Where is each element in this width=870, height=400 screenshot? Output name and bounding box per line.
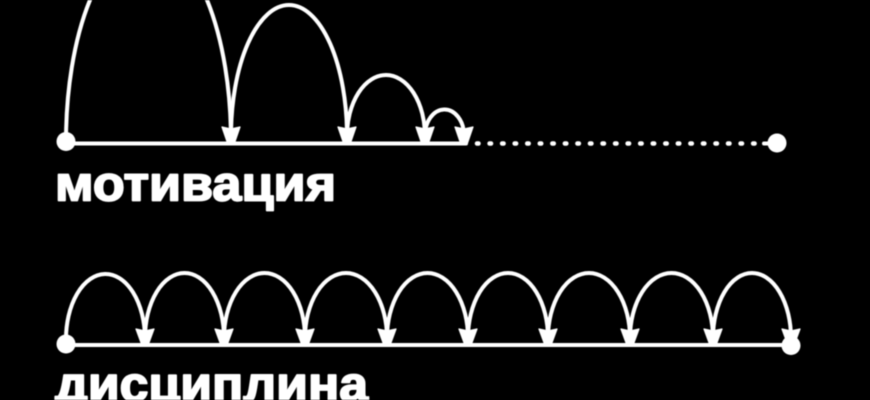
discipline end dot bbox=[782, 336, 800, 355]
motivation arrowhead 2 bbox=[338, 127, 356, 143]
discipline jump arcs bbox=[66, 273, 791, 340]
discipline start dot bbox=[56, 334, 76, 354]
motivation connector to end dot bbox=[764, 142, 772, 146]
discipline diagram bbox=[56, 273, 800, 355]
motivation start dot bbox=[56, 132, 76, 151]
motivation jump 4 bbox=[425, 109, 464, 136]
motivation arrowhead 4 bbox=[455, 127, 473, 143]
motivation baseline bbox=[66, 142, 466, 146]
motivation end dot bbox=[768, 134, 786, 152]
motivation jump 1 bbox=[66, 0, 231, 141]
motivation jump 2 bbox=[231, 5, 347, 136]
motivation diagram bbox=[56, 0, 786, 152]
motivation arrowhead 3 bbox=[416, 127, 434, 143]
heading: motivation: мотивация bbox=[55, 158, 336, 212]
discipline baseline bbox=[66, 343, 790, 347]
motivation dotted continuation bbox=[477, 141, 755, 146]
motivation arrowhead 1 bbox=[222, 127, 240, 143]
discipline arrowheads bbox=[136, 329, 800, 344]
motivation jump 3 bbox=[347, 75, 425, 136]
